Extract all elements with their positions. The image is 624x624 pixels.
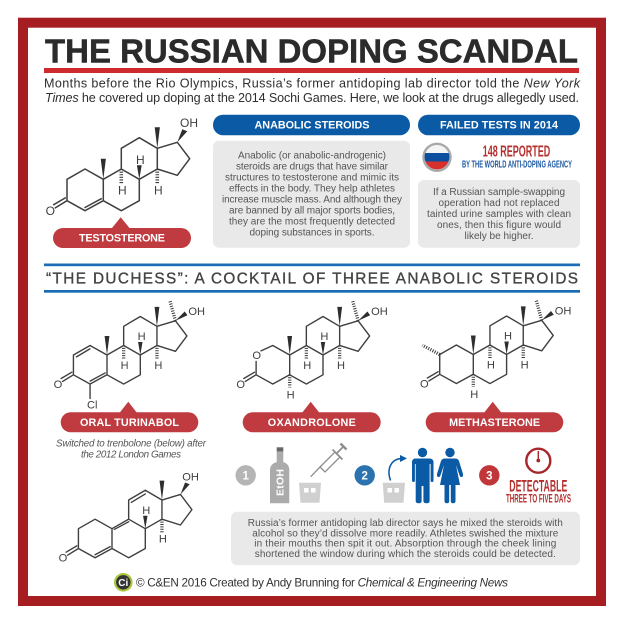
title: THE RUSSIAN DOPING SCANDAL <box>45 34 578 70</box>
molecule: oral turinabol: O <box>54 379 63 391</box>
section heading: the duchess: “THE DUCHESS”: A COCKTAIL OF THREE ANABOLIC STEROIDS <box>46 270 578 287</box>
heading: failed tests <box>418 115 580 135</box>
icon: ethanol bottle: EtOH <box>274 469 286 496</box>
panel: anabolic steroids text: doping substances in sports. <box>250 227 374 238</box>
molecule: testosterone: H <box>154 183 163 197</box>
molecule: methasterone: H <box>487 359 495 371</box>
molecule: trenbolone: O <box>59 553 68 565</box>
panel: failed tests text <box>418 180 580 248</box>
molecule: testosterone: O <box>46 204 55 218</box>
panel: failed tests text: ones, then this figure would <box>437 220 561 231</box>
label: oxandrolone <box>243 402 381 432</box>
icon: compound interest logo <box>114 573 133 592</box>
arrow: glass to mouth <box>389 455 407 480</box>
panel: anabolic steroids text: effects in the body. They help athletes <box>229 183 395 194</box>
note: trenbolone switch: Switched to trenbolone (below) after <box>56 439 207 450</box>
molecule: testosterone: OH <box>180 116 198 130</box>
molecule: oral turinabol <box>54 301 205 412</box>
heading: anabolic steroids: ANABOLIC STEROIDS <box>254 120 370 132</box>
intro text: Months before the Rio Olympics, Russia’s former antidoping lab director told the New York <box>44 76 581 90</box>
molecule: methasterone: OH <box>555 306 571 318</box>
title underline <box>44 68 579 73</box>
panel: mixing explanation <box>231 512 580 565</box>
molecule: oxandrolone: OH <box>371 306 388 318</box>
panel: anabolic steroids text: steroids are drugs that have similar <box>236 161 389 172</box>
molecule: testosterone: H <box>136 153 145 167</box>
molecule: oxandrolone <box>236 301 388 401</box>
icon: clock <box>526 449 550 473</box>
molecule: oxandrolone: H <box>303 360 311 372</box>
molecule: methasterone: H <box>504 331 512 343</box>
panel: mixing explanation: in their mouths then spit it out. Absorption through the cheek lining <box>254 539 556 550</box>
label: testosterone: TESTOSTERONE <box>79 232 165 244</box>
panel: anabolic steroids text: are banned by all major sports bodies, <box>229 205 395 216</box>
step 1 badge <box>236 465 256 485</box>
molecule: trenbolone: H <box>142 505 150 517</box>
icon: man <box>412 448 434 503</box>
molecule: trenbolone: OH <box>182 472 199 484</box>
icon: glass two <box>383 483 405 503</box>
footer credit: © C&EN 2016 Created by Andy Brunning for Chemical & Engineering News <box>136 576 508 589</box>
molecule: oral turinabol: OH <box>188 306 205 318</box>
icon: glass one <box>299 483 321 503</box>
icon: compound interest logo: Ci <box>118 578 129 589</box>
molecule: oxandrolone: H <box>320 331 328 343</box>
stat: three to five days: THREE TO FIVE DAYS <box>506 494 571 506</box>
intro text <box>44 76 581 105</box>
molecule: oral turinabol: H <box>121 360 129 372</box>
molecule: methasterone: H <box>521 359 529 371</box>
step 2 badge: 2 <box>361 470 368 482</box>
label: testosterone <box>53 217 191 248</box>
icon: syringe <box>311 444 346 477</box>
label: methasterone: METHASTERONE <box>449 417 540 429</box>
note: trenbolone switch: the 2012 London Games <box>81 450 181 461</box>
molecule: oxandrolone: H <box>287 389 295 401</box>
step 1 badge: 1 <box>242 470 249 482</box>
label: oral turinabol <box>61 402 198 432</box>
step 3 badge <box>479 465 499 485</box>
molecule: trenbolone: H <box>159 534 167 546</box>
panel: failed tests text: likely be higher. <box>464 231 534 242</box>
note: trenbolone switch <box>56 439 207 461</box>
molecule: methasterone: O <box>420 378 429 390</box>
label: oral turinabol: ORAL TURINABOL <box>80 417 179 429</box>
stat: detectable: DETECTABLE <box>509 478 567 496</box>
molecule: methasterone: H <box>470 389 478 401</box>
panel: failed tests text: tainted urine samples with clean <box>427 209 571 220</box>
heading: anabolic steroids <box>213 115 410 135</box>
molecule: methasterone <box>420 300 571 401</box>
panel: mixing explanation: Russia’s former antidoping lab director says he mixed the steroids with <box>248 518 563 529</box>
panel: anabolic steroids text: Anabolic (or anabolic-androgenic) <box>238 150 386 161</box>
panel: anabolic steroids text: increase muscle mass. And although they <box>222 194 402 205</box>
label: oxandrolone: OXANDROLONE <box>268 417 356 429</box>
stat: 148 reported: 148 REPORTED <box>483 144 550 161</box>
molecule: oral turinabol: Cl <box>87 400 97 412</box>
heading: failed tests: FAILED TESTS IN 2014 <box>440 120 558 132</box>
panel: mixing explanation: alcohol so they’d dissolve more readily. Athletes swished the mixture <box>252 528 559 539</box>
molecule: testosterone: H <box>118 183 127 197</box>
panel: anabolic steroids text: structures to testosterone and mimic its <box>225 172 399 183</box>
panel: anabolic steroids text: they are the most frequently detected <box>229 216 395 227</box>
molecule: testosterone <box>46 116 198 218</box>
molecule: trenbolone <box>59 472 199 565</box>
panel: failed tests text: If a Russian sample-swapping <box>433 187 565 198</box>
molecule: oxandrolone: H <box>337 360 345 372</box>
molecule: oral turinabol: H <box>138 331 146 343</box>
panel: anabolic steroids text <box>213 141 410 248</box>
panel: mixing explanation: shortened the window during which the steroids could be detected. <box>255 549 556 560</box>
icon: woman <box>437 448 463 503</box>
step 3 badge: 3 <box>486 470 493 482</box>
step 2 badge <box>354 465 375 485</box>
molecule: oxandrolone: O <box>252 350 261 362</box>
panel: failed tests text: operation had not replaced <box>438 198 560 209</box>
icon: russian flag <box>422 143 452 172</box>
intro text: Times he covered up doping at the 2014 Sochi Games. Here, we look at the drugs allegedly used. <box>45 91 579 105</box>
label: methasterone <box>426 402 563 432</box>
icon: ethanol bottle <box>270 447 289 503</box>
molecule: oxandrolone: O <box>236 379 245 391</box>
molecule: oral turinabol: H <box>154 360 162 372</box>
